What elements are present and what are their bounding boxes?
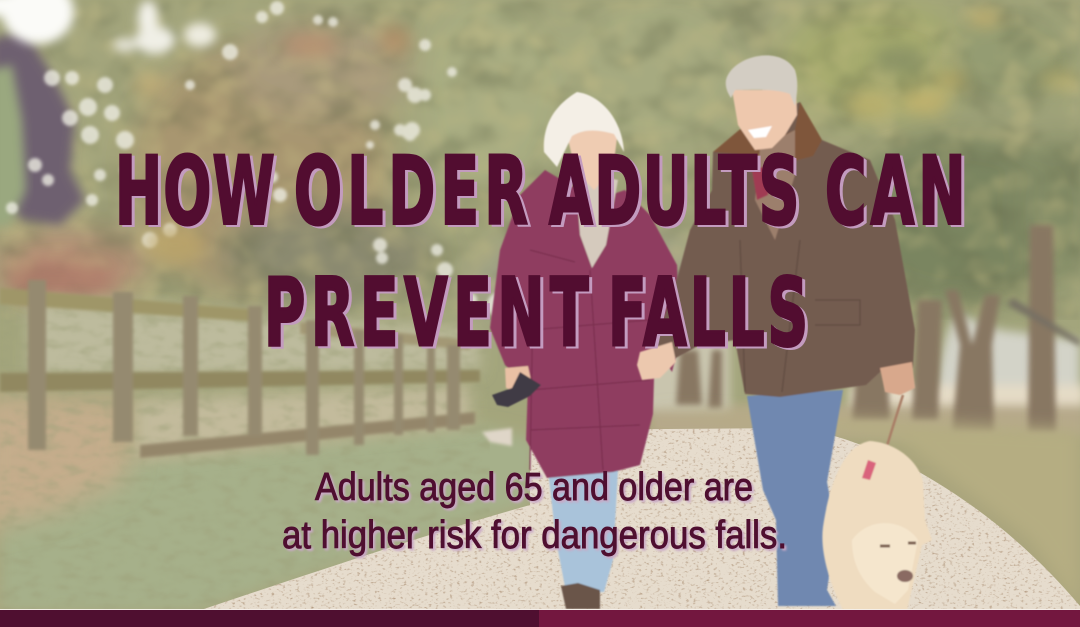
sky and dark tree top left [0,0,216,225]
man's jeans [747,390,843,606]
title line 1 [115,137,970,247]
title [115,137,970,368]
man's scarf [755,130,795,240]
woman's coat [490,170,680,478]
title line 2: FALLS [608,259,811,368]
figure: woman walking [490,92,680,609]
man's coat [655,102,915,397]
title line 1: CAN [825,137,970,247]
title line 2 [264,259,811,368]
foliage texture [0,0,1080,320]
woman's scarf [575,170,618,268]
dog head [852,523,918,604]
footer bar [0,609,1080,627]
man's face [732,90,797,150]
figure: man walking [637,55,915,606]
far field [640,315,1080,437]
woman's hand and gloves [505,366,532,392]
title line 1: HOW [115,137,276,247]
man's collar [713,102,822,162]
bokeh highlights [6,1,513,318]
woman's boots [561,583,600,609]
woman's white hair [544,92,624,167]
figure: golden dog on leash [822,395,932,610]
leash [881,395,903,465]
tree trunks right [676,225,1080,432]
dog eyes and nose [880,543,916,546]
wooden fence [0,280,480,458]
dog collar [862,460,876,480]
subtitle [282,466,787,557]
title line 1: OLDER [294,137,533,247]
subtitle: Adults aged 65 and older are [315,466,753,509]
path patch [482,428,512,446]
man's hand [880,362,915,395]
autumn leaf patches [5,8,1080,300]
blurred autumn foliage [0,0,1080,430]
woman's jeans [548,470,618,592]
clasped hands [637,342,676,380]
dog body [822,441,932,610]
title line 1: ADULTS [549,137,801,247]
man's grey hair [726,55,797,106]
subtitle: at higher risk for dangerous falls. [282,514,787,557]
woman's face [566,130,618,190]
grass verges [0,300,1080,612]
title line 2: PREVENT [264,259,594,368]
gravel path [195,428,1080,612]
